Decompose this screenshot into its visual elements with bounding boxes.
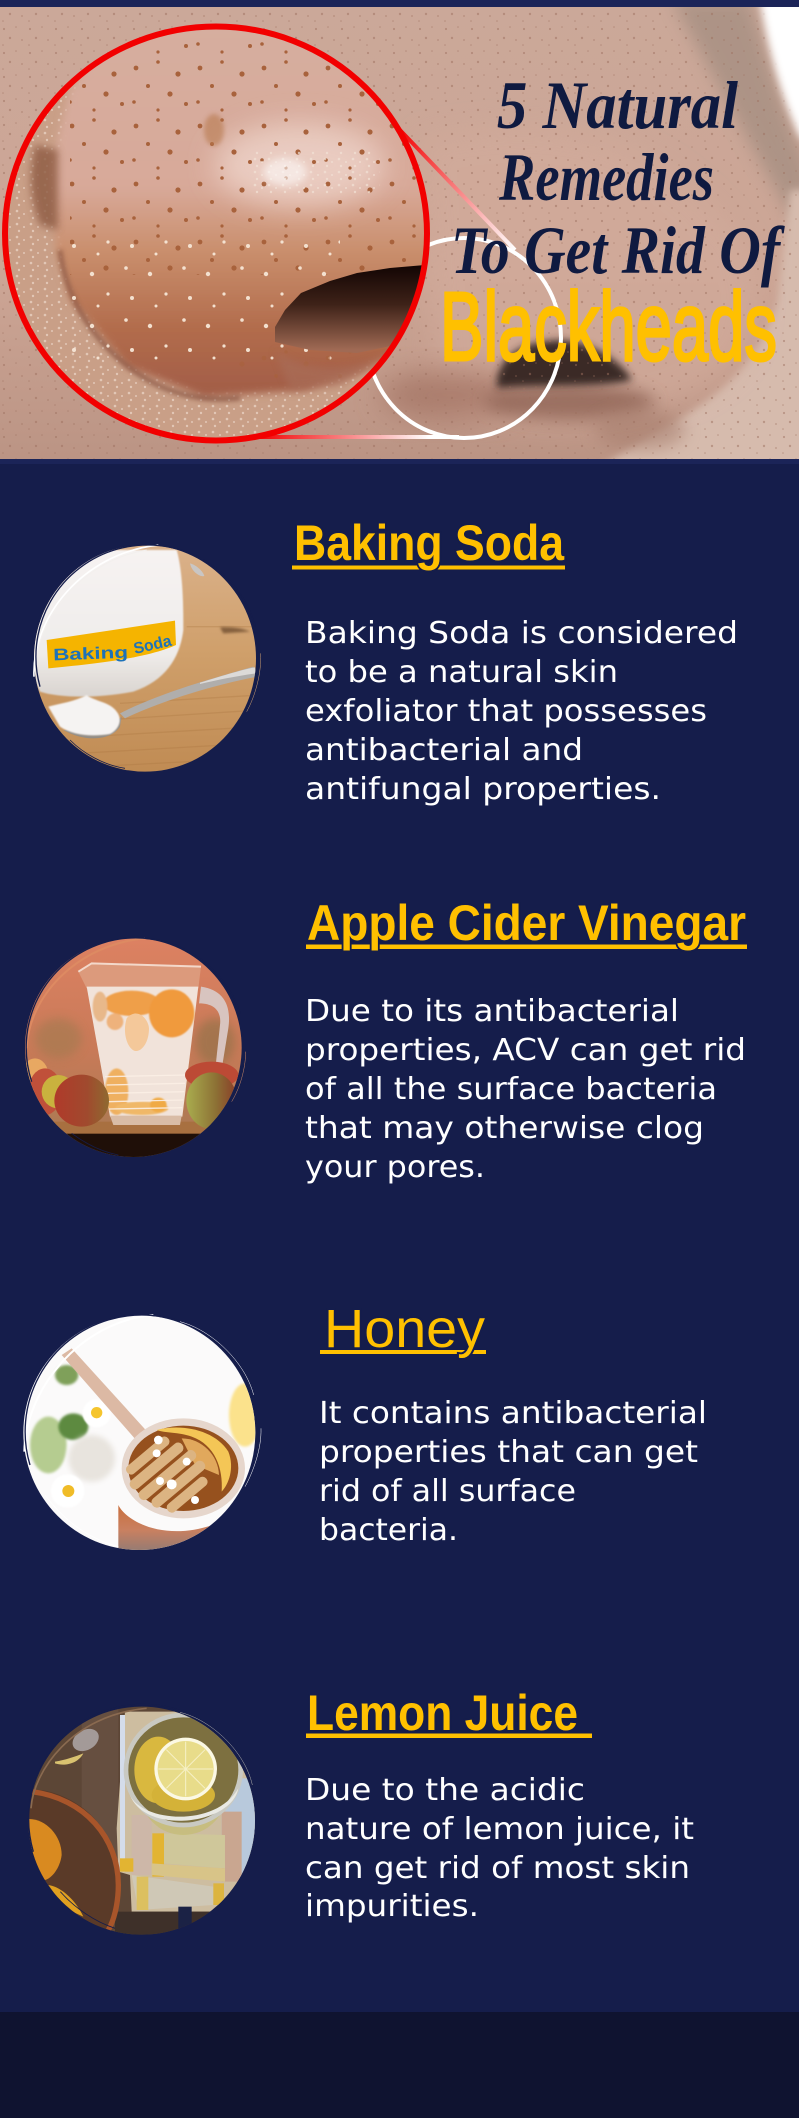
text: honey description (319, 1396, 707, 1548)
image: honey jar with dipper (15, 1305, 265, 1555)
heading: Baking Soda: Baking Soda (294, 515, 565, 571)
image: lemon water glass on cloth (28, 1706, 255, 1935)
text: lemon juice description: can get rid of most skin (305, 1851, 690, 1886)
panel: lemon juice (15, 1685, 694, 1945)
text: vinegar description: of all the surface bacteria (305, 1072, 717, 1107)
text: honey description: It contains antibacterial (319, 1396, 707, 1431)
panel: baking soda (20, 515, 738, 807)
text: baking soda description: to be a natural skin (305, 655, 618, 690)
text: honey description: rid of all surface (319, 1474, 576, 1509)
panel: apple cider vinegar (15, 895, 747, 1185)
image: baking soda jar and spoon (33, 544, 261, 772)
panel: magnified pores circle (0, 15, 440, 450)
connector lines from zoom circle to ring (255, 128, 515, 437)
image: baking soda jar and spoon: Baking (53, 643, 128, 664)
text: baking soda description: antibacterial and (305, 733, 583, 768)
panel: honey (15, 1299, 707, 1555)
title: 5 Natural Remedies To Get Rid Of (451, 67, 785, 288)
text: honey description: bacteria. (319, 1513, 458, 1548)
text: vinegar description: your pores. (305, 1150, 485, 1185)
text: lemon juice description: impurities. (305, 1889, 479, 1924)
band under header (0, 459, 799, 464)
title: 5 Natural Remedies To Get Rid Of: Remedies (498, 139, 714, 215)
panel: header nose photo (0, 0, 799, 480)
heading: Honey: Honey (324, 1299, 485, 1359)
icon: small white ring on nose (367, 238, 561, 438)
text: baking soda description: Baking Soda is considered (305, 616, 738, 651)
text: lemon juice description: Due to the acidic (305, 1773, 585, 1808)
text: vinegar description: that may otherwise clog (305, 1111, 704, 1146)
heading: Lemon Juice: Lemon Juice (307, 1685, 578, 1741)
image: baking soda jar and spoon: Soda (132, 633, 173, 658)
text: baking soda description: antifungal properties. (305, 772, 661, 807)
text: vinegar description: properties, ACV can get rid (305, 1033, 746, 1068)
text: vinegar description: Due to its antibacterial (305, 994, 679, 1029)
title: 5 Natural Remedies To Get Rid Of: 5 Natural (497, 67, 738, 143)
image: pitcher of vinegar and apples (25, 937, 246, 1157)
text: honey description: properties that can get (319, 1435, 698, 1470)
top band (0, 0, 799, 7)
text: vinegar description (305, 994, 746, 1185)
text: baking soda description (305, 616, 738, 807)
text: lemon juice description: nature of lemon juice, it (305, 1812, 694, 1847)
text: lemon juice description (305, 1773, 694, 1924)
text: baking soda description: exfoliator that possesses (305, 694, 707, 729)
footer band (0, 2012, 799, 2118)
heading: Apple Cider Vinegar: Apple Cider Vinegar (307, 895, 746, 951)
